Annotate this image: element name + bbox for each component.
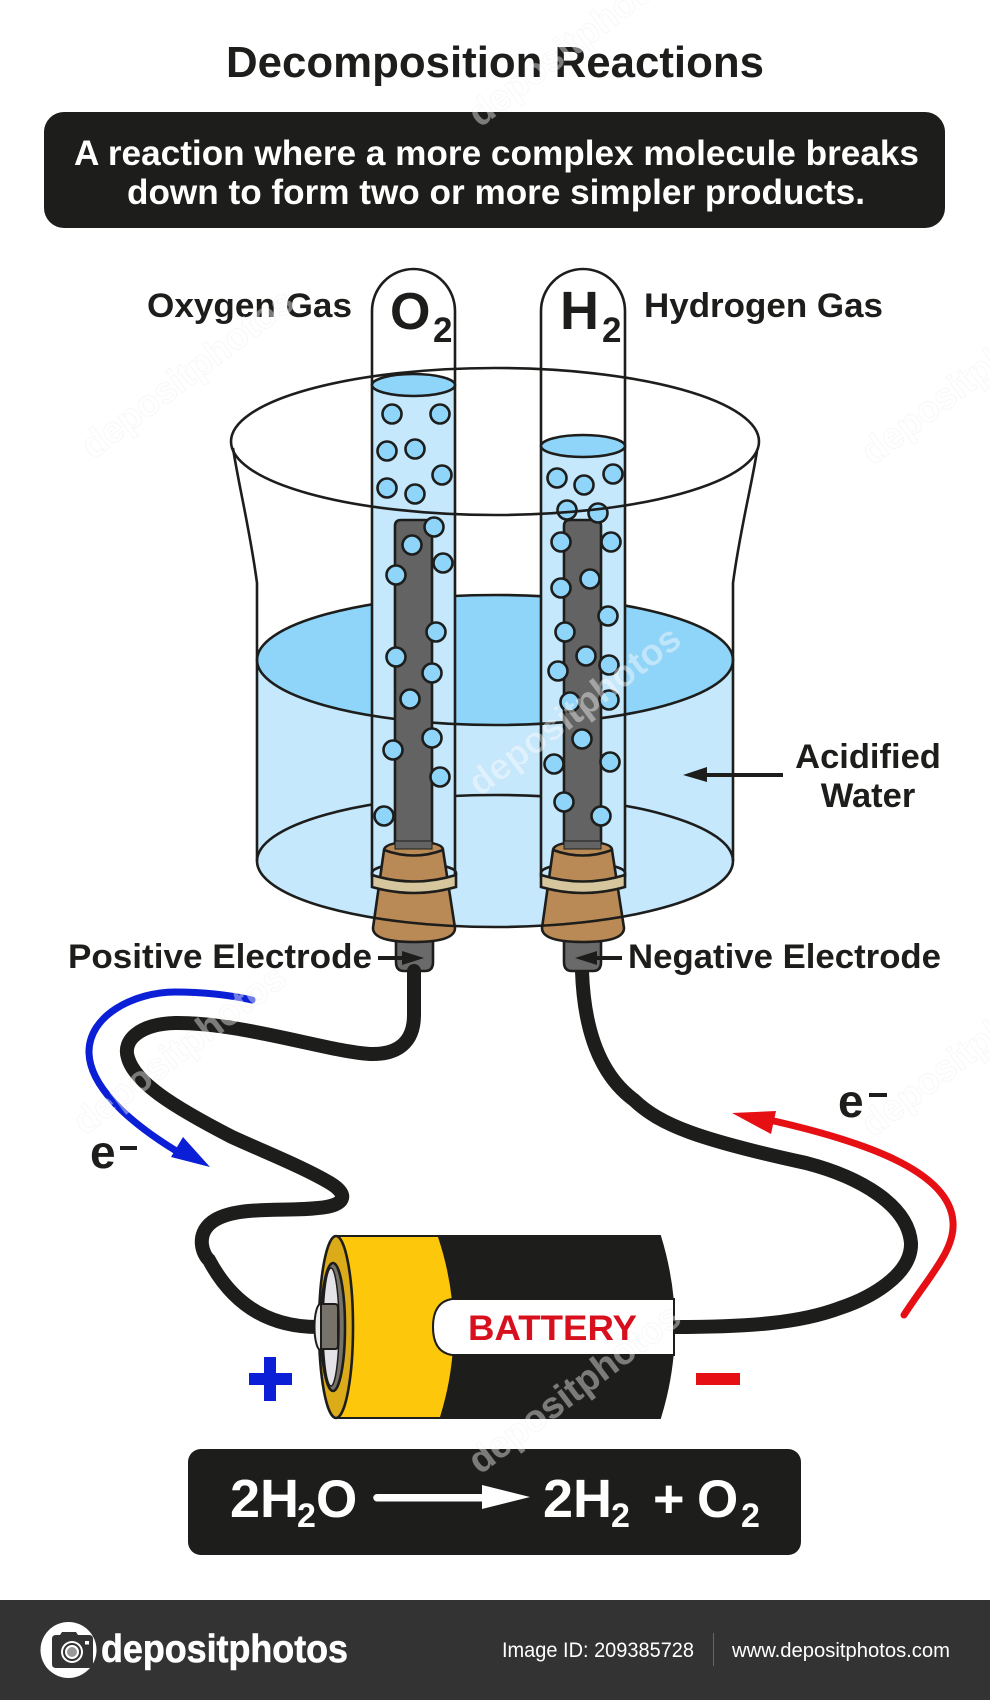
label: negative electrode: Negative Electrode bbox=[628, 938, 941, 976]
label: hydrogen gas: Hydrogen Gas bbox=[644, 287, 883, 325]
formula: O2 bbox=[390, 283, 452, 350]
chemical equation panel: 2 bbox=[297, 1497, 316, 1535]
label: acidified water: Acidified bbox=[795, 738, 941, 776]
formula: O2: O bbox=[390, 283, 430, 341]
footer bar: depositphotos bbox=[101, 1628, 348, 1671]
title: Decomposition Reactions bbox=[226, 39, 764, 87]
arrow to negative electrode bbox=[575, 951, 622, 965]
arrow to water bbox=[683, 767, 783, 782]
footer bar: www.depositphotos.com bbox=[731, 1639, 950, 1662]
formula: H2: H bbox=[560, 281, 599, 341]
electron label left bbox=[90, 1126, 137, 1178]
battery: BATTERY bbox=[468, 1308, 637, 1348]
beaker with acidified water bbox=[233, 448, 757, 927]
chemical equation panel: O bbox=[316, 1470, 357, 1529]
chemical equation panel: 2H bbox=[543, 1469, 612, 1529]
definition banner: down to form two or more simpler products. bbox=[127, 173, 865, 212]
right electrode rod bbox=[564, 520, 601, 848]
left rubber stopper bbox=[372, 841, 456, 971]
electron label right bbox=[838, 1075, 887, 1127]
footer bar bbox=[0, 1600, 990, 1700]
definition banner bbox=[44, 112, 945, 228]
chemical equation panel: 2 bbox=[741, 1497, 760, 1535]
formula: H2 bbox=[560, 281, 621, 350]
label: positive electrode: Positive Electrode bbox=[68, 938, 372, 976]
label: oxygen gas: Oxygen Gas bbox=[147, 287, 352, 325]
label: acidified water: Water bbox=[821, 777, 915, 815]
watermarks: depositphotos bbox=[73, 280, 301, 466]
watermarks: depositphotos bbox=[460, 1295, 688, 1481]
chemical equation panel: O bbox=[697, 1470, 738, 1529]
positive wire bbox=[127, 971, 414, 1327]
right rubber stopper bbox=[541, 841, 625, 971]
red electron flow arrow bbox=[732, 1111, 953, 1315]
left electrode rod bbox=[395, 520, 432, 848]
arrow to positive electrode bbox=[378, 951, 424, 965]
beaker bottom front line bbox=[257, 861, 733, 927]
minus sign bbox=[696, 1373, 740, 1385]
watermarks: depositphotos bbox=[65, 956, 293, 1142]
hydrogen bubbles bbox=[544, 464, 622, 826]
beaker rim bbox=[231, 368, 759, 515]
right test tube: hydrogen bbox=[541, 269, 625, 877]
water surface front line bbox=[257, 660, 733, 725]
label: acidified water bbox=[795, 738, 941, 815]
footer bar: Image ID: 209385728 bbox=[502, 1639, 694, 1662]
watermarks: depositphotos bbox=[460, 617, 688, 803]
electron label left: e bbox=[90, 1126, 116, 1178]
plus sign bbox=[249, 1357, 292, 1401]
left test tube: oxygen bbox=[372, 269, 455, 877]
definition banner: A reaction where a more complex molecule breaks bbox=[74, 134, 919, 173]
electron label right: e bbox=[838, 1075, 864, 1127]
chemical equation panel bbox=[188, 1449, 801, 1555]
blue electron flow arrow bbox=[89, 992, 252, 1167]
formula: O2: 2 bbox=[433, 311, 452, 350]
chemical equation panel: + bbox=[653, 1469, 685, 1529]
battery bbox=[314, 1236, 674, 1418]
chemical equation panel: 2 bbox=[611, 1497, 630, 1535]
oxygen bubbles bbox=[374, 404, 452, 826]
icon: camera logo bbox=[40, 1622, 96, 1678]
formula: H2: 2 bbox=[602, 311, 621, 350]
negative wire bbox=[582, 971, 911, 1327]
chemical equation panel: 2H bbox=[230, 1469, 299, 1529]
